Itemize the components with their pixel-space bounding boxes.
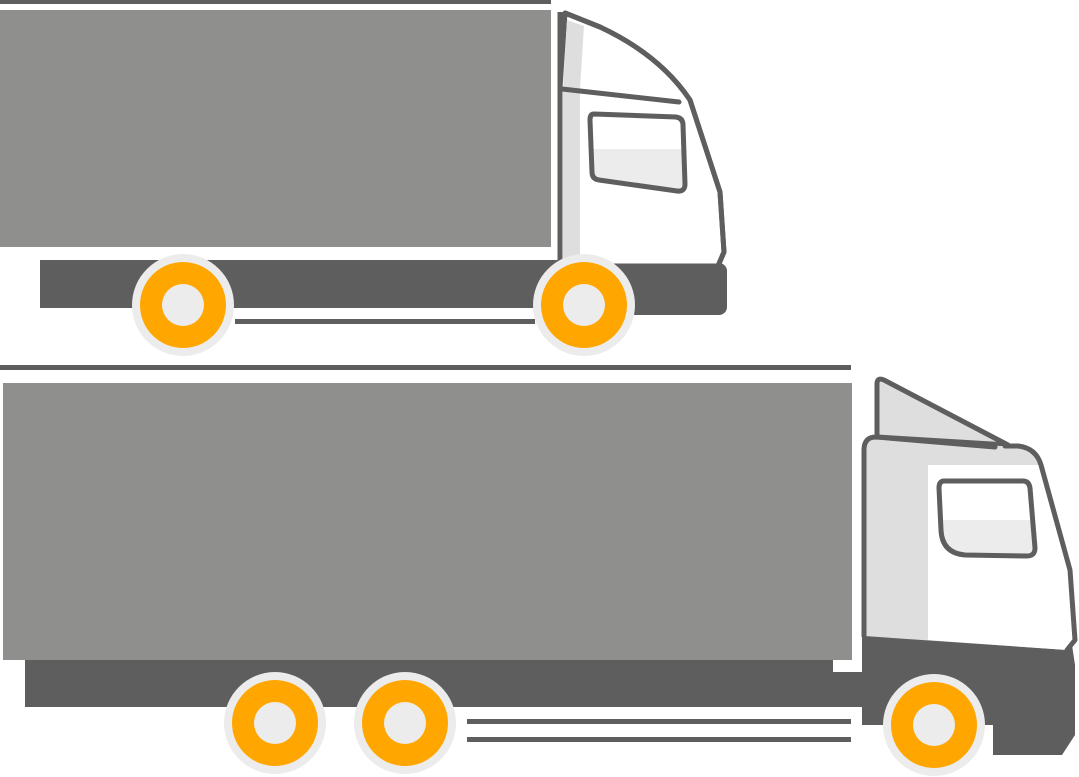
road lines xyxy=(235,319,535,324)
cargo top line xyxy=(0,0,551,4)
wheel: front xyxy=(533,254,635,356)
truck: small (top) xyxy=(0,0,727,356)
window xyxy=(590,114,685,191)
chassis xyxy=(25,630,1075,755)
wheel: front xyxy=(883,674,985,776)
spoiler xyxy=(877,379,1008,445)
cab xyxy=(864,437,1075,650)
window xyxy=(939,481,1035,556)
cab xyxy=(560,12,724,266)
wheel: rear xyxy=(132,254,234,356)
wheel: rear 2 xyxy=(354,672,456,774)
cargo box xyxy=(3,383,852,660)
cargo top line xyxy=(0,365,851,370)
cargo box xyxy=(0,10,551,247)
wheel: rear 1 xyxy=(224,672,326,774)
chassis xyxy=(40,260,727,315)
road lines xyxy=(467,719,851,742)
truck: large (bottom) xyxy=(0,365,1075,776)
